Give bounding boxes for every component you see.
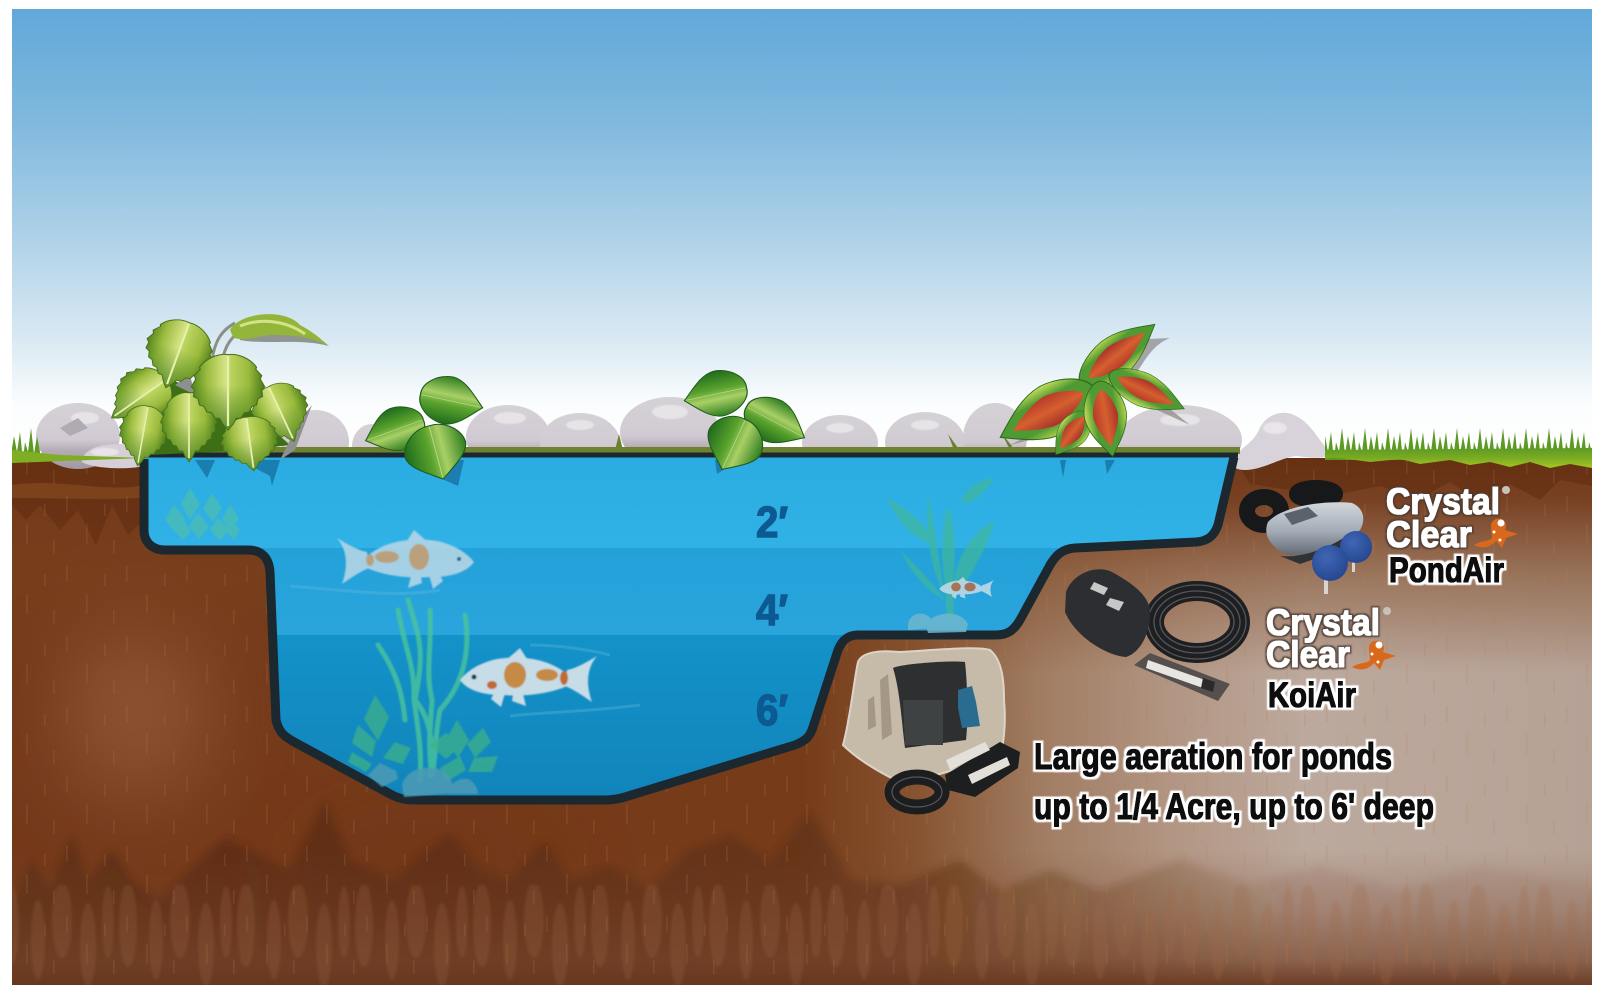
rocks under mid plant (908, 614, 968, 633)
tubing coil (892, 777, 942, 807)
pond (130, 455, 1240, 805)
fish: small koi (939, 577, 994, 599)
depth label 6 feet: 6′ (756, 686, 788, 735)
plant: dark green center (684, 370, 806, 470)
dark interior (893, 661, 967, 748)
fish: lower koi (460, 648, 597, 707)
product: PondAir air pump with diffusers (1247, 487, 1372, 594)
plant: large pale green (111, 314, 329, 472)
air tubing coils (1247, 487, 1336, 525)
tubing coil (1154, 591, 1240, 653)
plant: red and green (1000, 324, 1190, 457)
blue fitting (958, 686, 980, 728)
sky (12, 9, 1592, 396)
soil ground (12, 458, 1592, 986)
depth label 4 feet: 4′ (756, 586, 788, 635)
plant: dark green middle left (364, 376, 484, 480)
fish: upper koi (337, 530, 474, 589)
water plant shallow left (165, 488, 240, 541)
brand: Crystal Clear PondAir: Crystal (1386, 481, 1500, 522)
rocks along the pond rim (36, 397, 1330, 475)
grass right (1325, 428, 1592, 468)
water layers (130, 455, 1240, 805)
brand: Crystal Clear KoiAir (1266, 602, 1396, 715)
brand: Crystal Clear KoiAir: Clear (1266, 634, 1350, 675)
product: large aeration cabinet with compressors (843, 648, 1020, 807)
pump body (1266, 502, 1363, 555)
pond liner outline (144, 457, 1234, 800)
brand: Crystal Clear KoiAir: KoiAir (1268, 676, 1356, 715)
ripple lines (290, 586, 640, 716)
grass left (12, 428, 134, 463)
caption: large aeration: up to 1/4 Acre, up to 6' deep (1034, 786, 1434, 827)
diffuser plate (1134, 653, 1230, 701)
grass strip on rim (130, 434, 1240, 454)
product: KoiAir pump, tubing and diffuser (1065, 569, 1246, 701)
brand: Crystal Clear KoiAir: Crystal (1266, 602, 1380, 643)
leaf shadows on water (195, 460, 1115, 486)
rock cabinet (843, 648, 1005, 785)
caption: large aeration (1034, 736, 1434, 827)
brand: Crystal Clear PondAir: Clear (1386, 514, 1472, 555)
water plant mid right (887, 478, 995, 620)
compressors (945, 742, 1020, 797)
brand: Crystal Clear PondAir: PondAir (1389, 551, 1504, 590)
koi logo (1352, 641, 1396, 670)
koi logo (1474, 519, 1518, 548)
water plant deep (348, 600, 498, 797)
brand: Crystal Clear PondAir (1386, 481, 1518, 590)
caption: large aeration: Large aeration for ponds (1034, 736, 1392, 777)
diffuser stones (1324, 560, 1355, 594)
depth label 2 feet: 2′ (756, 498, 788, 547)
pump (1065, 569, 1150, 657)
